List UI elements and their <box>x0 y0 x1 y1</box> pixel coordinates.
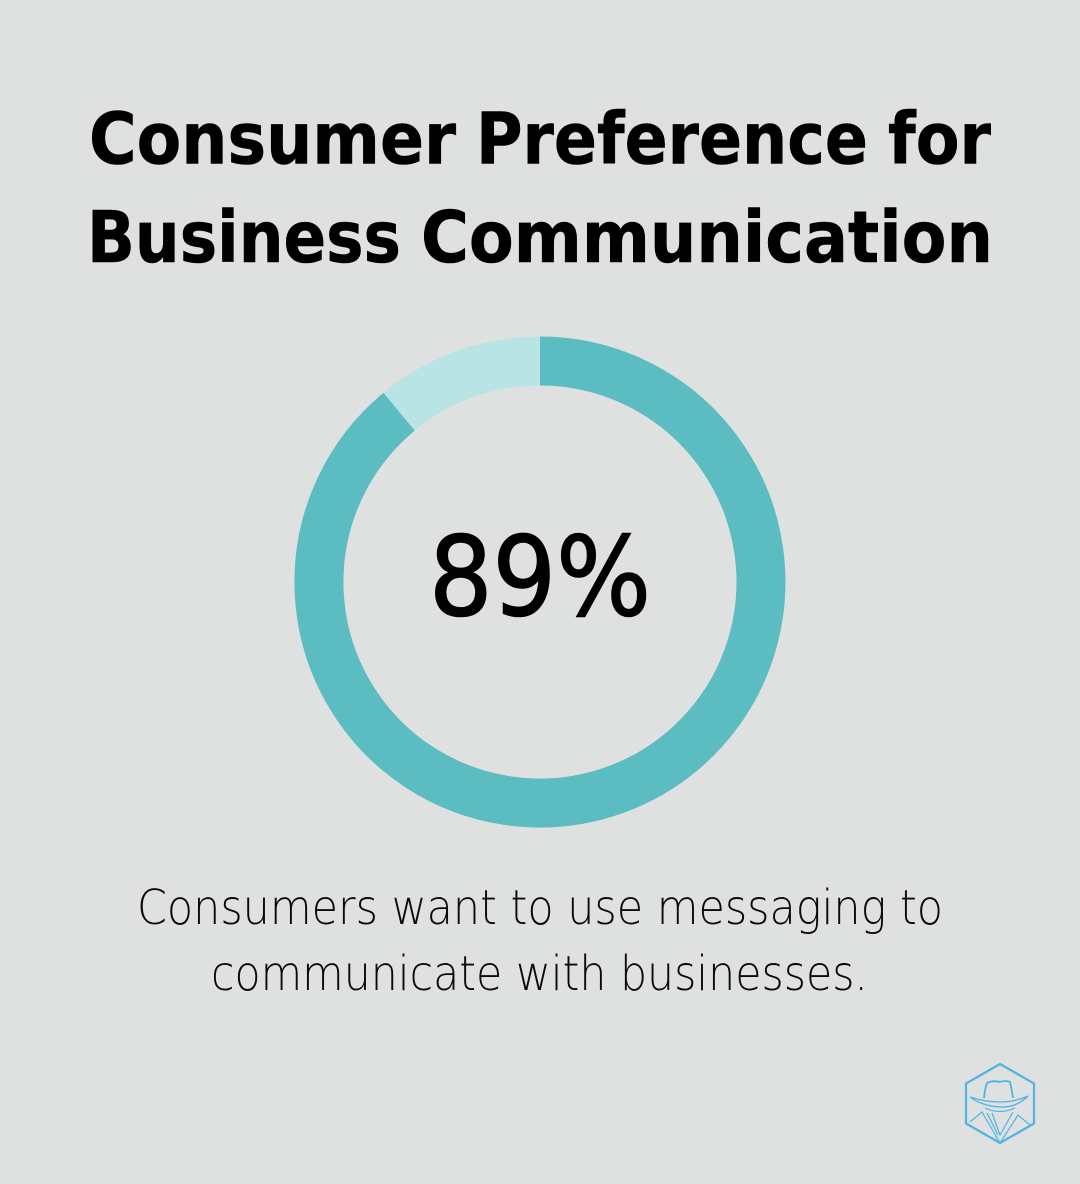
hat brim <box>970 1096 1028 1107</box>
title: Communication <box>421 196 993 279</box>
title <box>87 98 993 279</box>
title: for <box>888 98 991 180</box>
hexagon outline <box>966 1064 1034 1143</box>
hat crown <box>984 1081 1013 1098</box>
remaining 11 percent arc <box>399 361 540 412</box>
89 percent arc <box>319 361 761 803</box>
title: Business <box>87 196 401 279</box>
title: Preference <box>476 98 868 180</box>
description text: Consumers want to use messaging to <box>137 880 943 936</box>
description text: communicate with businesses. <box>211 946 868 1002</box>
collar <box>970 1108 1030 1143</box>
description text <box>137 880 943 1002</box>
center value: 89% <box>429 513 651 641</box>
donut chart: 89 percent <box>319 361 761 803</box>
title: Consumer <box>89 98 456 180</box>
icon: hexagon spy logo <box>966 1064 1034 1143</box>
